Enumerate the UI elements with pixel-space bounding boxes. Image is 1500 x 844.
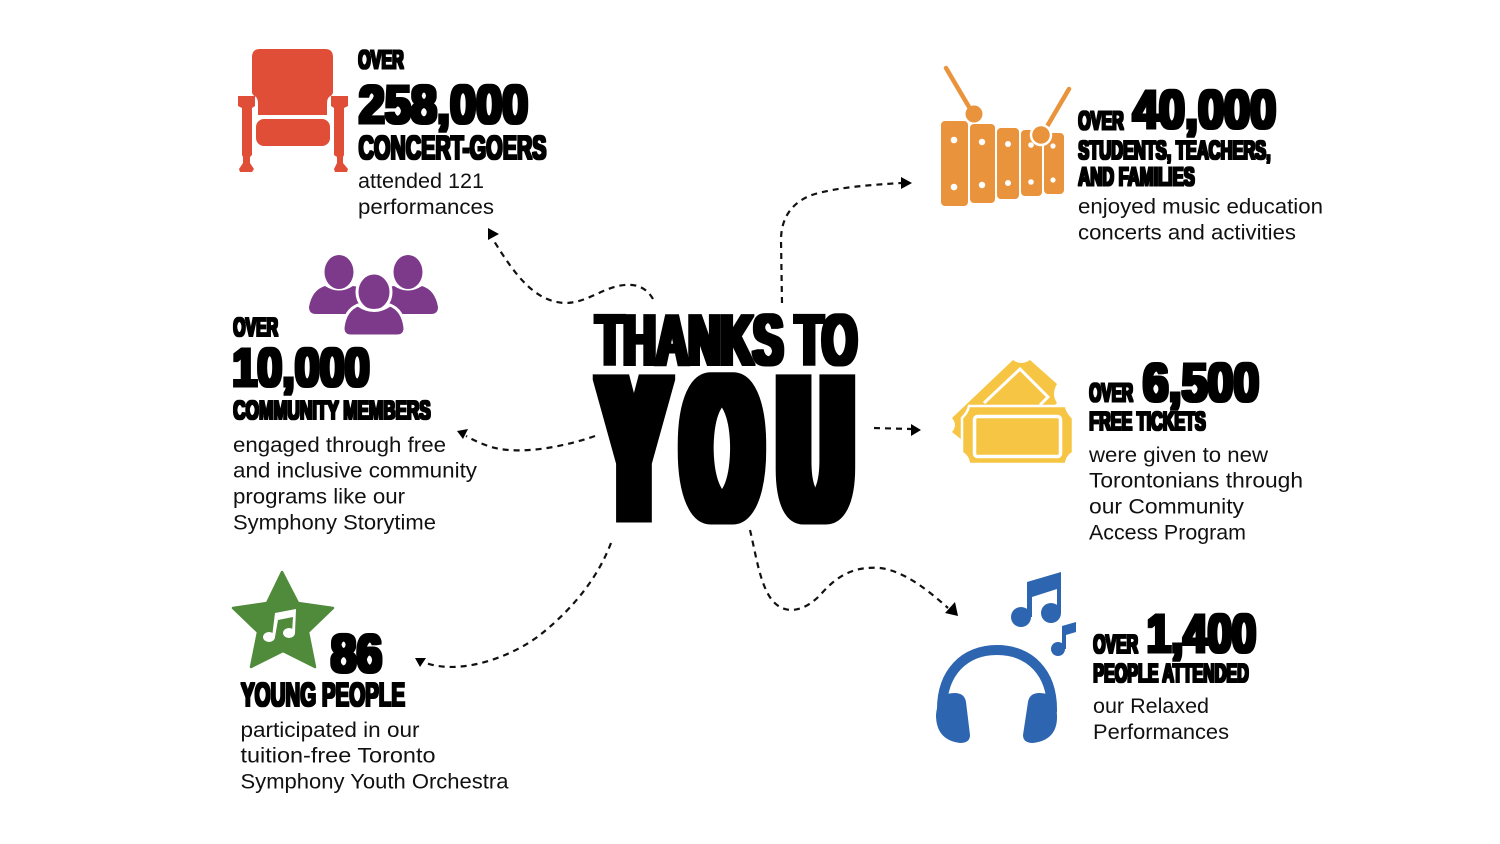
label: over: OVER [1093,631,1138,659]
label: over: OVER [1078,107,1124,135]
panel: community members [232,255,478,534]
description: enjoyed music education [1078,196,1323,219]
label: and families: AND FAMILIES [1078,164,1195,192]
label: people attended: PEOPLE ATTENDED [1093,660,1249,688]
description [1078,196,1323,245]
panel: concert-goers [238,46,546,219]
description: Symphony Storytime [233,512,436,534]
description: Performances [1093,721,1229,744]
label: free tickets: FREE TICKETS [1089,408,1206,436]
arrow: to students and families [781,177,912,303]
description [233,434,478,534]
description [240,719,509,794]
description: and inclusive community [233,460,478,482]
icon: theatre seat [238,49,348,172]
arrow: to free tickets [874,424,921,436]
description [1088,444,1303,544]
description: were given to new [1088,444,1269,467]
description [358,170,494,219]
panel: relaxed performances [936,572,1256,744]
icon: headphones and music notes [936,572,1076,743]
label: concert-goers: CONCERT-GOERS [358,130,546,167]
heading: thanks to: THANKS TO [596,301,857,381]
panel: students teachers families [941,68,1323,245]
icon: people group [309,255,438,336]
label: over: OVER [1089,379,1133,407]
description: performances [358,196,494,219]
panel: young people [233,572,509,794]
panel: free tickets [952,353,1303,544]
arrow: to community members [457,429,595,450]
description: our Community [1089,496,1245,518]
number: 10,000: 10,000 [232,338,370,398]
description: attended 121 [358,170,484,193]
label: community members: COMMUNITY MEMBERS [233,397,431,425]
number: 258,000: 258,000 [359,75,528,135]
label: young people: YOUNG PEOPLE [241,677,405,714]
icon: star with music note [233,572,333,667]
description: engaged through free [233,434,446,457]
number: 1,400: 1,400 [1147,604,1256,664]
title: thanks to you [596,301,857,565]
icon: xylophone [941,68,1069,206]
description: tuition-free Toronto [240,745,436,768]
arrow: to young people [415,543,611,667]
description: participated in our [240,719,420,742]
label: over: OVER [233,314,278,342]
number: 86: 86 [331,624,382,684]
arrow: to concert-goers [488,228,653,303]
description [1093,695,1229,744]
arrow: to relaxed performances [750,530,958,616]
heading: you: YOU [602,332,850,565]
number: 6,500: 6,500 [1143,353,1259,413]
description: Symphony Youth Orchestra [240,771,509,794]
label: over: OVER [358,46,404,74]
icon: tickets [952,360,1073,464]
description: our Relaxed [1093,695,1209,718]
description: Access Program [1089,522,1246,544]
description: programs like our [233,486,405,508]
number: 40,000: 40,000 [1133,80,1276,140]
description: Torontonians through [1089,470,1303,492]
description: concerts and activities [1078,222,1296,245]
label: students teachers: STUDENTS, TEACHERS, [1078,137,1271,165]
